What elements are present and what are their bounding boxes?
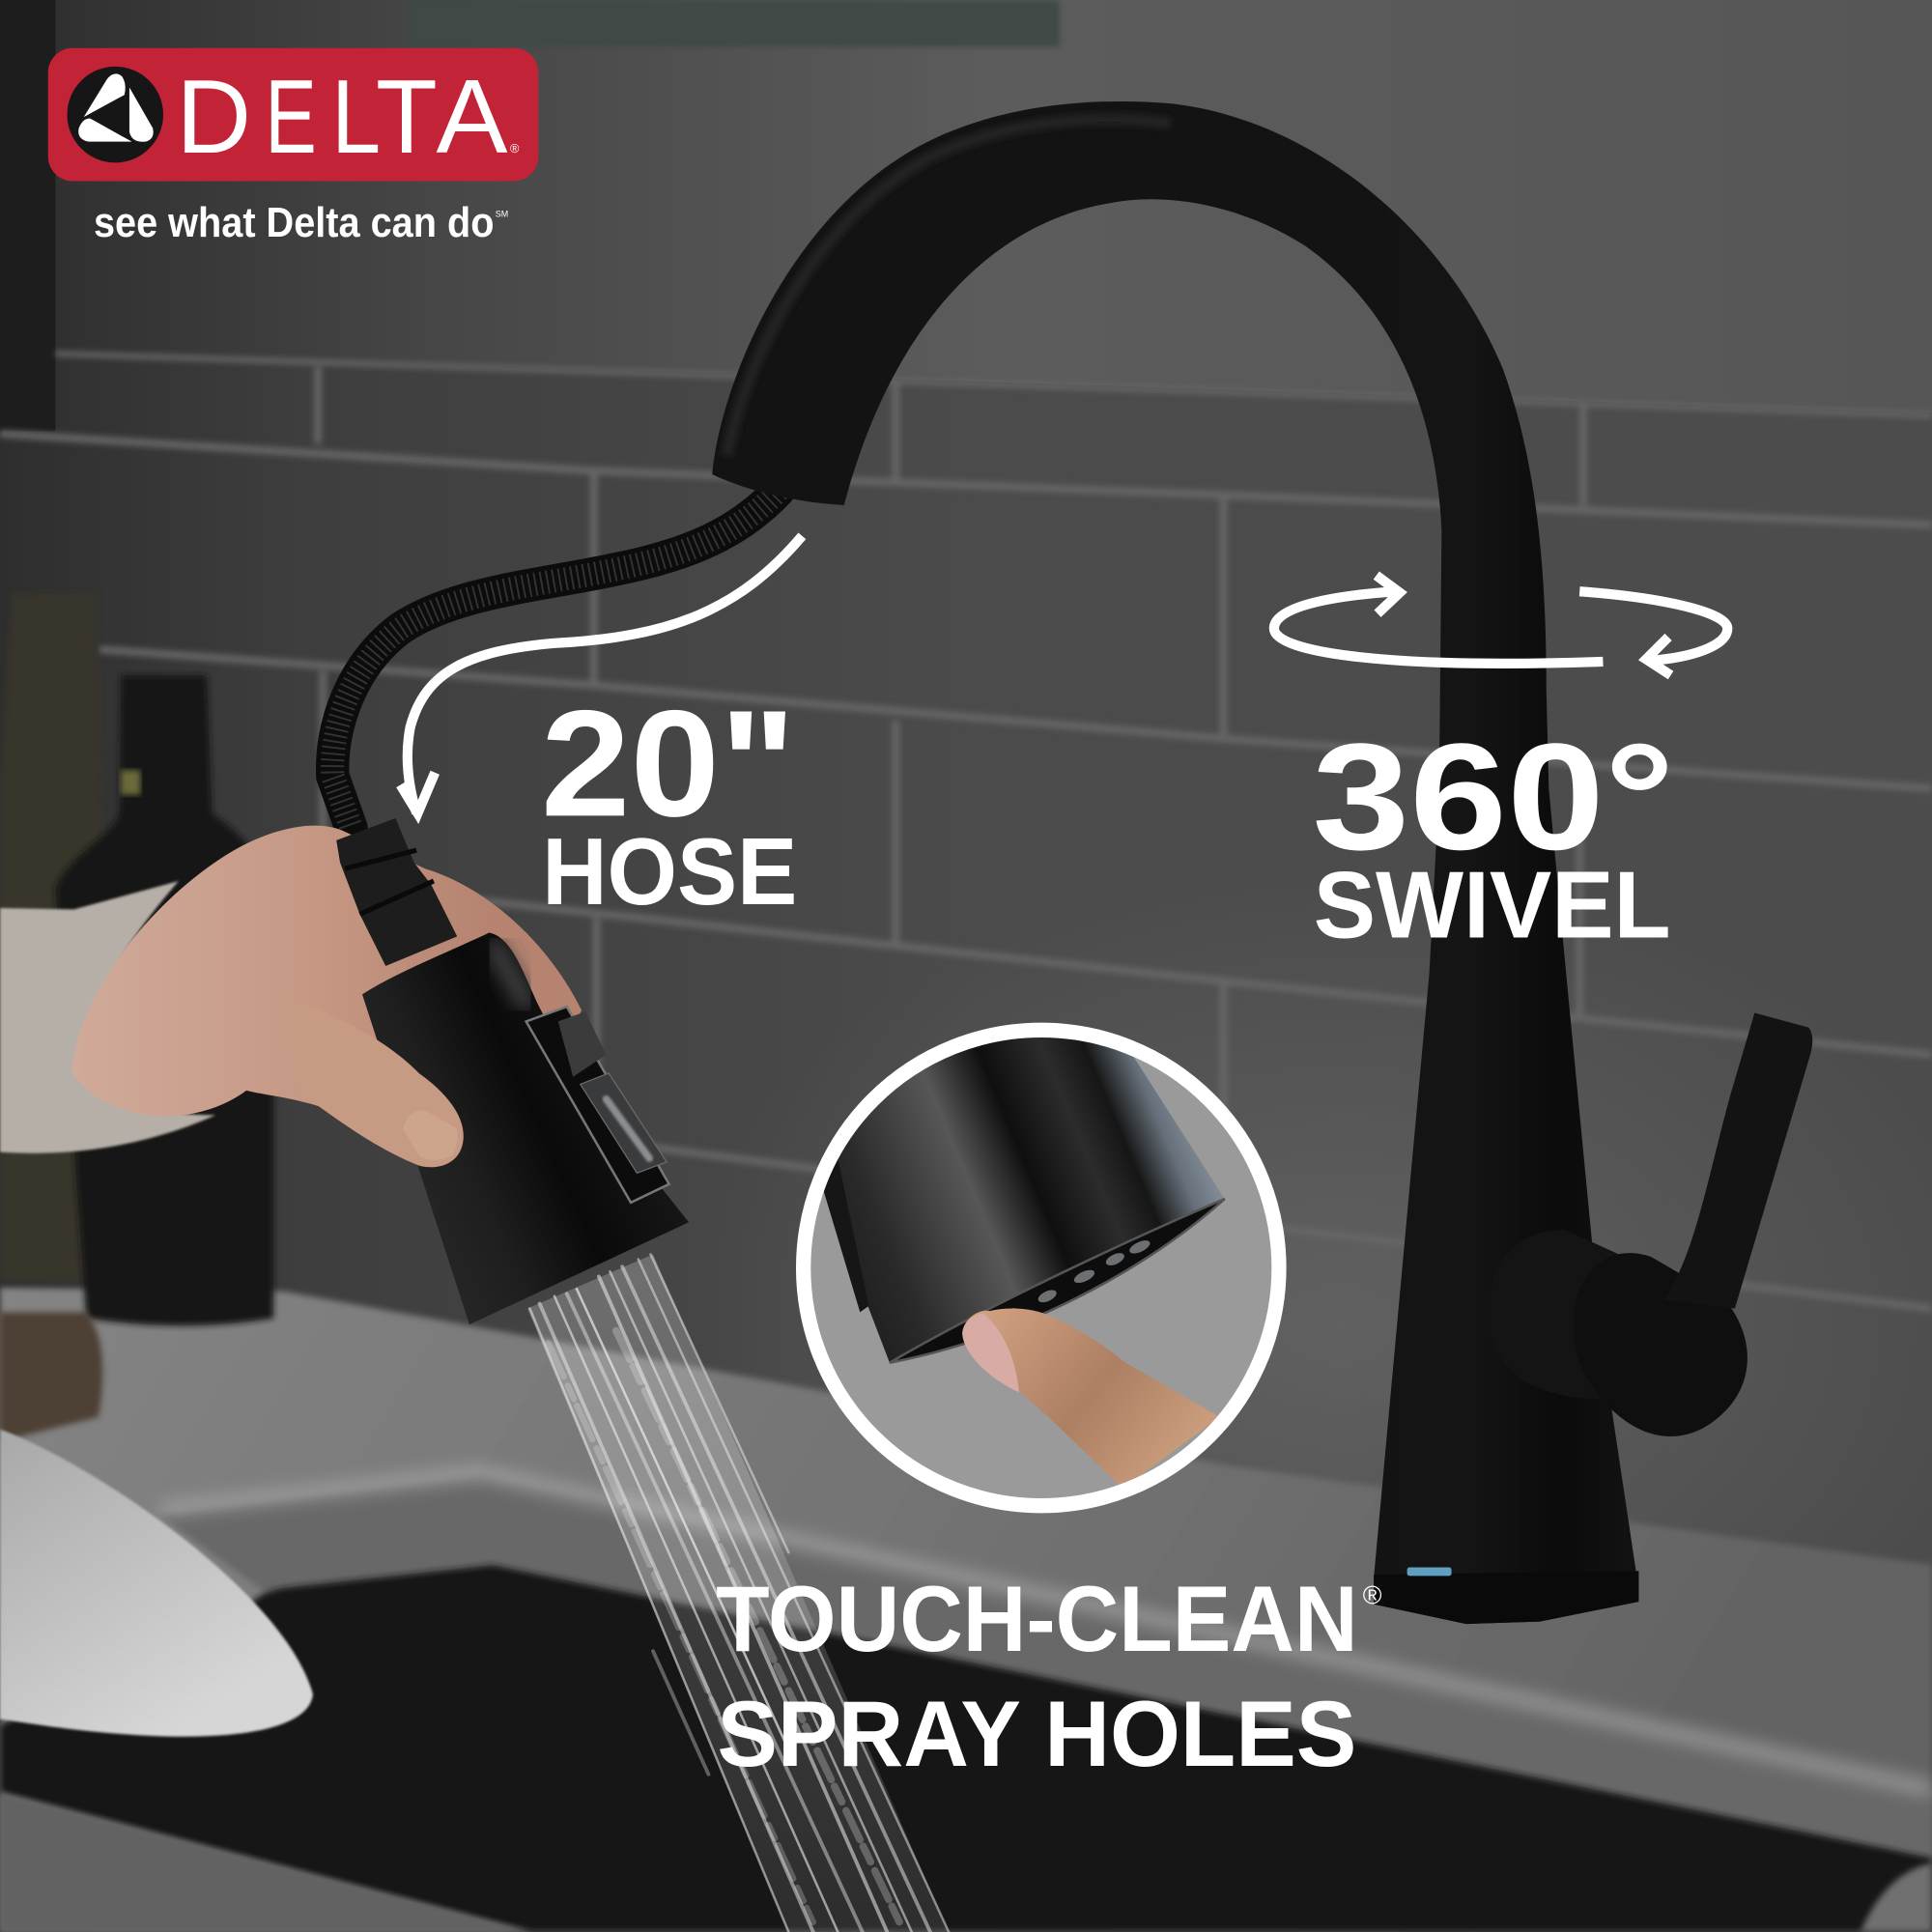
fingertip [962, 1308, 1220, 1489]
dark left edge [0, 0, 55, 431]
DELTA wordmark: T [376, 58, 438, 175]
DELTA wordmark: A [437, 58, 508, 175]
thumb [290, 999, 464, 1167]
sink basin [0, 1565, 1932, 1932]
swivel label: SWIVEL [1314, 852, 1671, 958]
faucet base plate [1374, 1571, 1638, 1624]
fingernail [962, 1314, 1019, 1392]
white bowl [0, 1430, 313, 1737]
sprayer highlight [496, 949, 525, 1001]
callout: 360 degree swivel [1312, 713, 1674, 958]
handle lever [1663, 1012, 1812, 1309]
callout: 20 inch hose [541, 679, 797, 924]
knit sleeve [0, 881, 215, 1153]
spray holes [1012, 1240, 1150, 1309]
handle hub [1489, 1230, 1651, 1399]
lower spray button [581, 1073, 667, 1173]
inset white ring [804, 1030, 1279, 1506]
lower counter [0, 1793, 529, 1932]
360 degree number: 360° [1312, 713, 1674, 882]
white triangle emblem [78, 73, 154, 142]
hose length arrow [401, 536, 802, 813]
arrow head [401, 773, 435, 813]
black circle emblem [68, 67, 163, 162]
pull-down hose [332, 491, 779, 828]
spout arc shading [727, 119, 1171, 456]
spray holes line: SPRAY HOLES [717, 1681, 1356, 1786]
left rotation arc [1274, 591, 1603, 664]
right rotation arc [1579, 591, 1727, 661]
inset: touch-clean nozzle [804, 1010, 1279, 1506]
spray face [890, 1199, 1225, 1363]
counter front face [160, 1476, 1932, 1861]
red badge [48, 48, 538, 181]
thumb nail [403, 1110, 457, 1160]
DELTA wordmark: E [265, 58, 317, 175]
DELTA wordmark: D [176, 58, 251, 175]
hand [71, 826, 582, 1116]
registered mark: ® [1363, 1581, 1382, 1610]
curved arrow shaft [408, 536, 802, 813]
collar body [336, 818, 457, 966]
golden bottle [0, 594, 104, 1282]
wooden board [0, 1312, 102, 1441]
wall light glow [616, 678, 1932, 1602]
counter front edge highlight [160, 1472, 1932, 1789]
nozzle side button edge [823, 1158, 868, 1312]
callout: touch-clean spray holes [716, 1566, 1382, 1786]
inset backdrop [804, 1030, 1279, 1506]
inset photo [823, 1010, 1225, 1489]
counter top [0, 1288, 1932, 1932]
faucet [712, 101, 1812, 1624]
nozzle body [838, 1037, 1224, 1362]
collar rings [345, 850, 434, 914]
DELTA wordmark: L [331, 58, 381, 175]
blue indicator light [1407, 1567, 1452, 1576]
hose braid [332, 491, 779, 828]
hose core [332, 491, 779, 828]
sprayer collar [336, 818, 457, 966]
grout lines [0, 354, 1932, 1309]
Delta logo [48, 48, 538, 246]
upper spray button [558, 1011, 607, 1077]
hose label: HOSE [542, 818, 797, 924]
service mark: SM [496, 209, 508, 218]
right counter corner [1861, 1863, 1932, 1932]
handle knob [1574, 1253, 1747, 1436]
water haze [527, 1254, 949, 1932]
logo registered mark: ® [510, 141, 520, 156]
DELTA wordmark [176, 58, 508, 175]
button streak [607, 1099, 649, 1158]
sprayer head [362, 933, 689, 1324]
right arrow head [1646, 637, 1671, 675]
dark wine bottle [55, 675, 273, 1325]
tagline: see what Delta can do [94, 200, 494, 246]
touch-clean line: TOUCH-CLEAN [716, 1566, 1358, 1671]
left arrow head [1377, 576, 1400, 613]
gooseneck spout and body [712, 101, 1638, 1624]
window reflection [407, 0, 1060, 46]
hand and sprayer [0, 818, 689, 1324]
swivel rotation arrows [1274, 576, 1727, 675]
button frame [526, 1007, 669, 1203]
upper cabinet band [55, 0, 1932, 412]
water spray [527, 1254, 949, 1932]
20 inch number: 20" [541, 679, 796, 848]
bottle label reflections [121, 770, 140, 795]
